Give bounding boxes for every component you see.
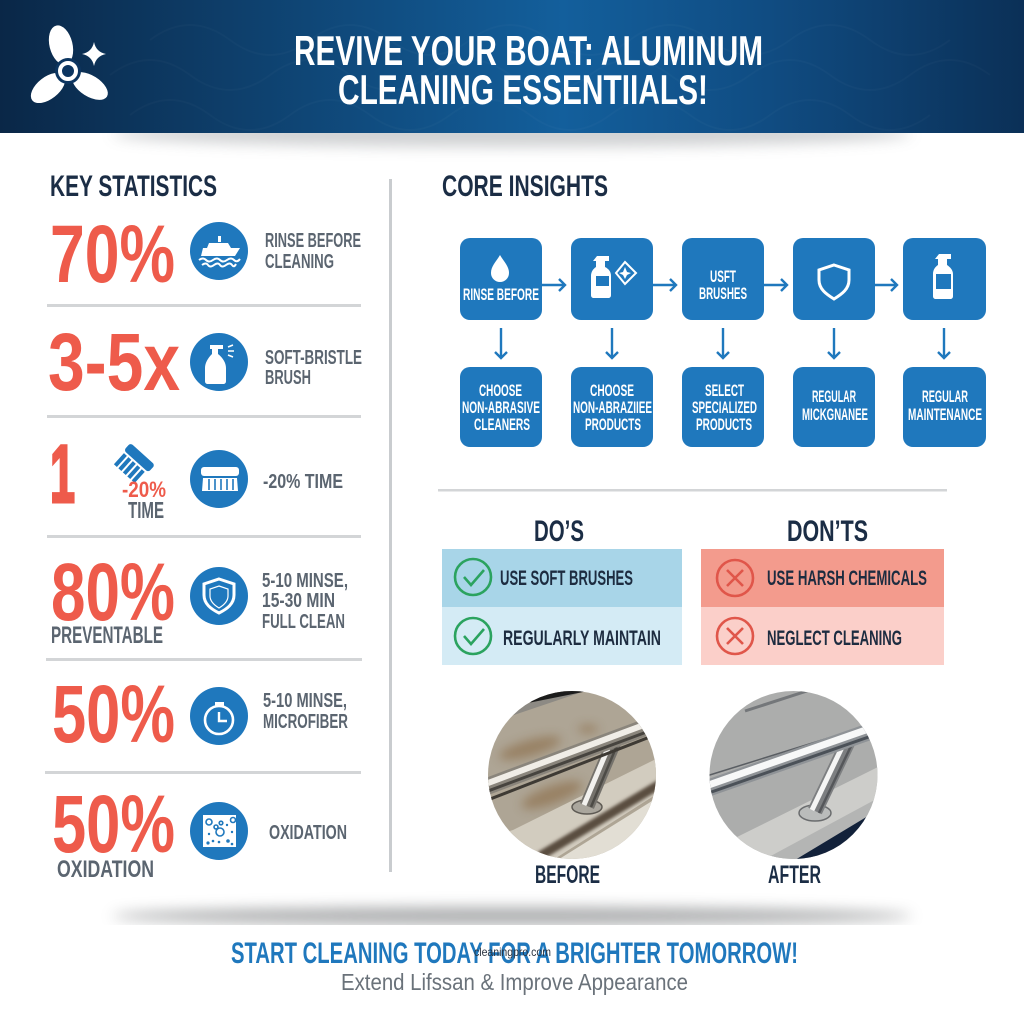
stat: 80% preventable: PREVENTABLE [51,622,163,649]
heading: core insights: CORE INSIGHTS [442,170,608,203]
box labels: SPECIALIZED [692,399,757,417]
stat: 3-5x: 3-5x [48,317,180,408]
box labels: PRODUCTS [585,416,641,434]
stat: 80% preventable [51,547,348,649]
stat: 50% microfiber: 5-10 MINSE, [263,690,347,712]
stat: 1 / -20% time [50,429,343,523]
panel: do's: USE SOFT BRUSHES [500,567,633,590]
box labels: RINSE BEFORE [463,286,539,304]
icon: check [455,559,491,595]
label: before: BEFORE [535,861,600,889]
box labels: CHOOSE [590,382,634,400]
box labels: PRODUCTS [696,416,752,434]
panel: don'ts [701,515,944,665]
box labels: MICKGNANEE [802,406,868,424]
stat: 70% [50,209,361,300]
icon: small brush [112,443,155,485]
stat: 3-5x: BRUSH [265,367,311,389]
stat: 50% oxidation: OXIDATION [57,856,154,883]
panel: don'ts: DON’TS [787,515,868,548]
heading: key statistics: KEY STATISTICS [50,170,217,203]
stat: 50% microfiber [52,669,348,760]
title: CLEANING ESSENTIIALS! [338,66,708,113]
stat: 50% oxidation: OXIDATION [269,822,347,844]
flow: top row boxes [460,238,986,320]
stat: 80% preventable: 80% [51,547,175,638]
stat: 70%: 70% [50,209,175,300]
label: after: AFTER [768,861,821,889]
panel: don'ts: USE HARSH CHEMICALS [767,567,927,590]
stat: 80% preventable: 15-30 MIN [262,590,335,612]
box labels: USFT [710,268,736,286]
icon: shield [819,265,849,299]
stat: 50% oxidation [52,779,347,883]
panel: core insights [442,170,986,447]
stat: 70%: RINSE BEFORE [265,230,361,252]
footer call to action: Extend Lifssan & Improve Appearance [341,969,688,995]
panel: do's: DO’S [534,515,584,548]
header shadow [112,121,912,147]
icon: water drop [491,255,509,282]
stat: 1 / -20% time: 1 [50,429,75,520]
icon: cross [717,618,753,654]
photo: after [710,691,878,859]
panel: key statistics [45,170,362,883]
box labels: CHOOSE [479,382,522,400]
stat: 50% microfiber: MICROFIBER [263,711,348,733]
icon: spray bottle [933,254,953,299]
box labels: SELECT [705,382,744,400]
footer shadow [112,907,912,925]
box labels: NON-ABRASIVE [462,399,540,417]
box labels: CLEANERS [474,416,530,434]
box labels: BRUSHES [699,285,747,303]
flow: arrows [495,279,950,358]
title: REVIVE YOUR BOAT: ALUMINUM [294,27,763,74]
stat: 1 / -20% time: -20% TIME [263,471,343,493]
icon: check [455,618,491,654]
footer call to action: cleaningpro.com [474,945,551,959]
flow: bottom row boxes [460,367,986,447]
stat: 1 / -20% time: -20% [122,477,166,502]
panel: do's [442,515,682,665]
stat: 50% microfiber: 50% [52,669,175,760]
stat: 3-5x: SOFT-BRISTLE [265,347,362,369]
panel: do's: REGULARLY MAINTAIN [503,627,661,650]
stat: 80% preventable: 5-10 MINSE, [262,570,348,592]
stat: 1 / -20% time: TIME [128,497,164,523]
box labels: NON-ABRAZIIEE [573,399,652,417]
box labels: REGULAR [812,388,856,406]
icon: propeller with sparkle [25,23,113,109]
icon: spray bottle and sparkle [591,256,636,298]
title [294,27,763,113]
box labels [462,268,982,434]
stat: 50% oxidation: 50% [52,779,175,870]
header banner [0,0,1024,133]
icon: cross [717,560,753,596]
stat: 3-5x [48,317,362,408]
stat: 80% preventable: FULL CLEAN [262,611,345,633]
stat: 70%: CLEANING [265,251,334,273]
box labels: REGULAR [922,388,968,406]
photo: before [488,691,656,859]
panel: don'ts: NEGLECT CLEANING [767,627,902,650]
footer call to action [231,937,798,995]
